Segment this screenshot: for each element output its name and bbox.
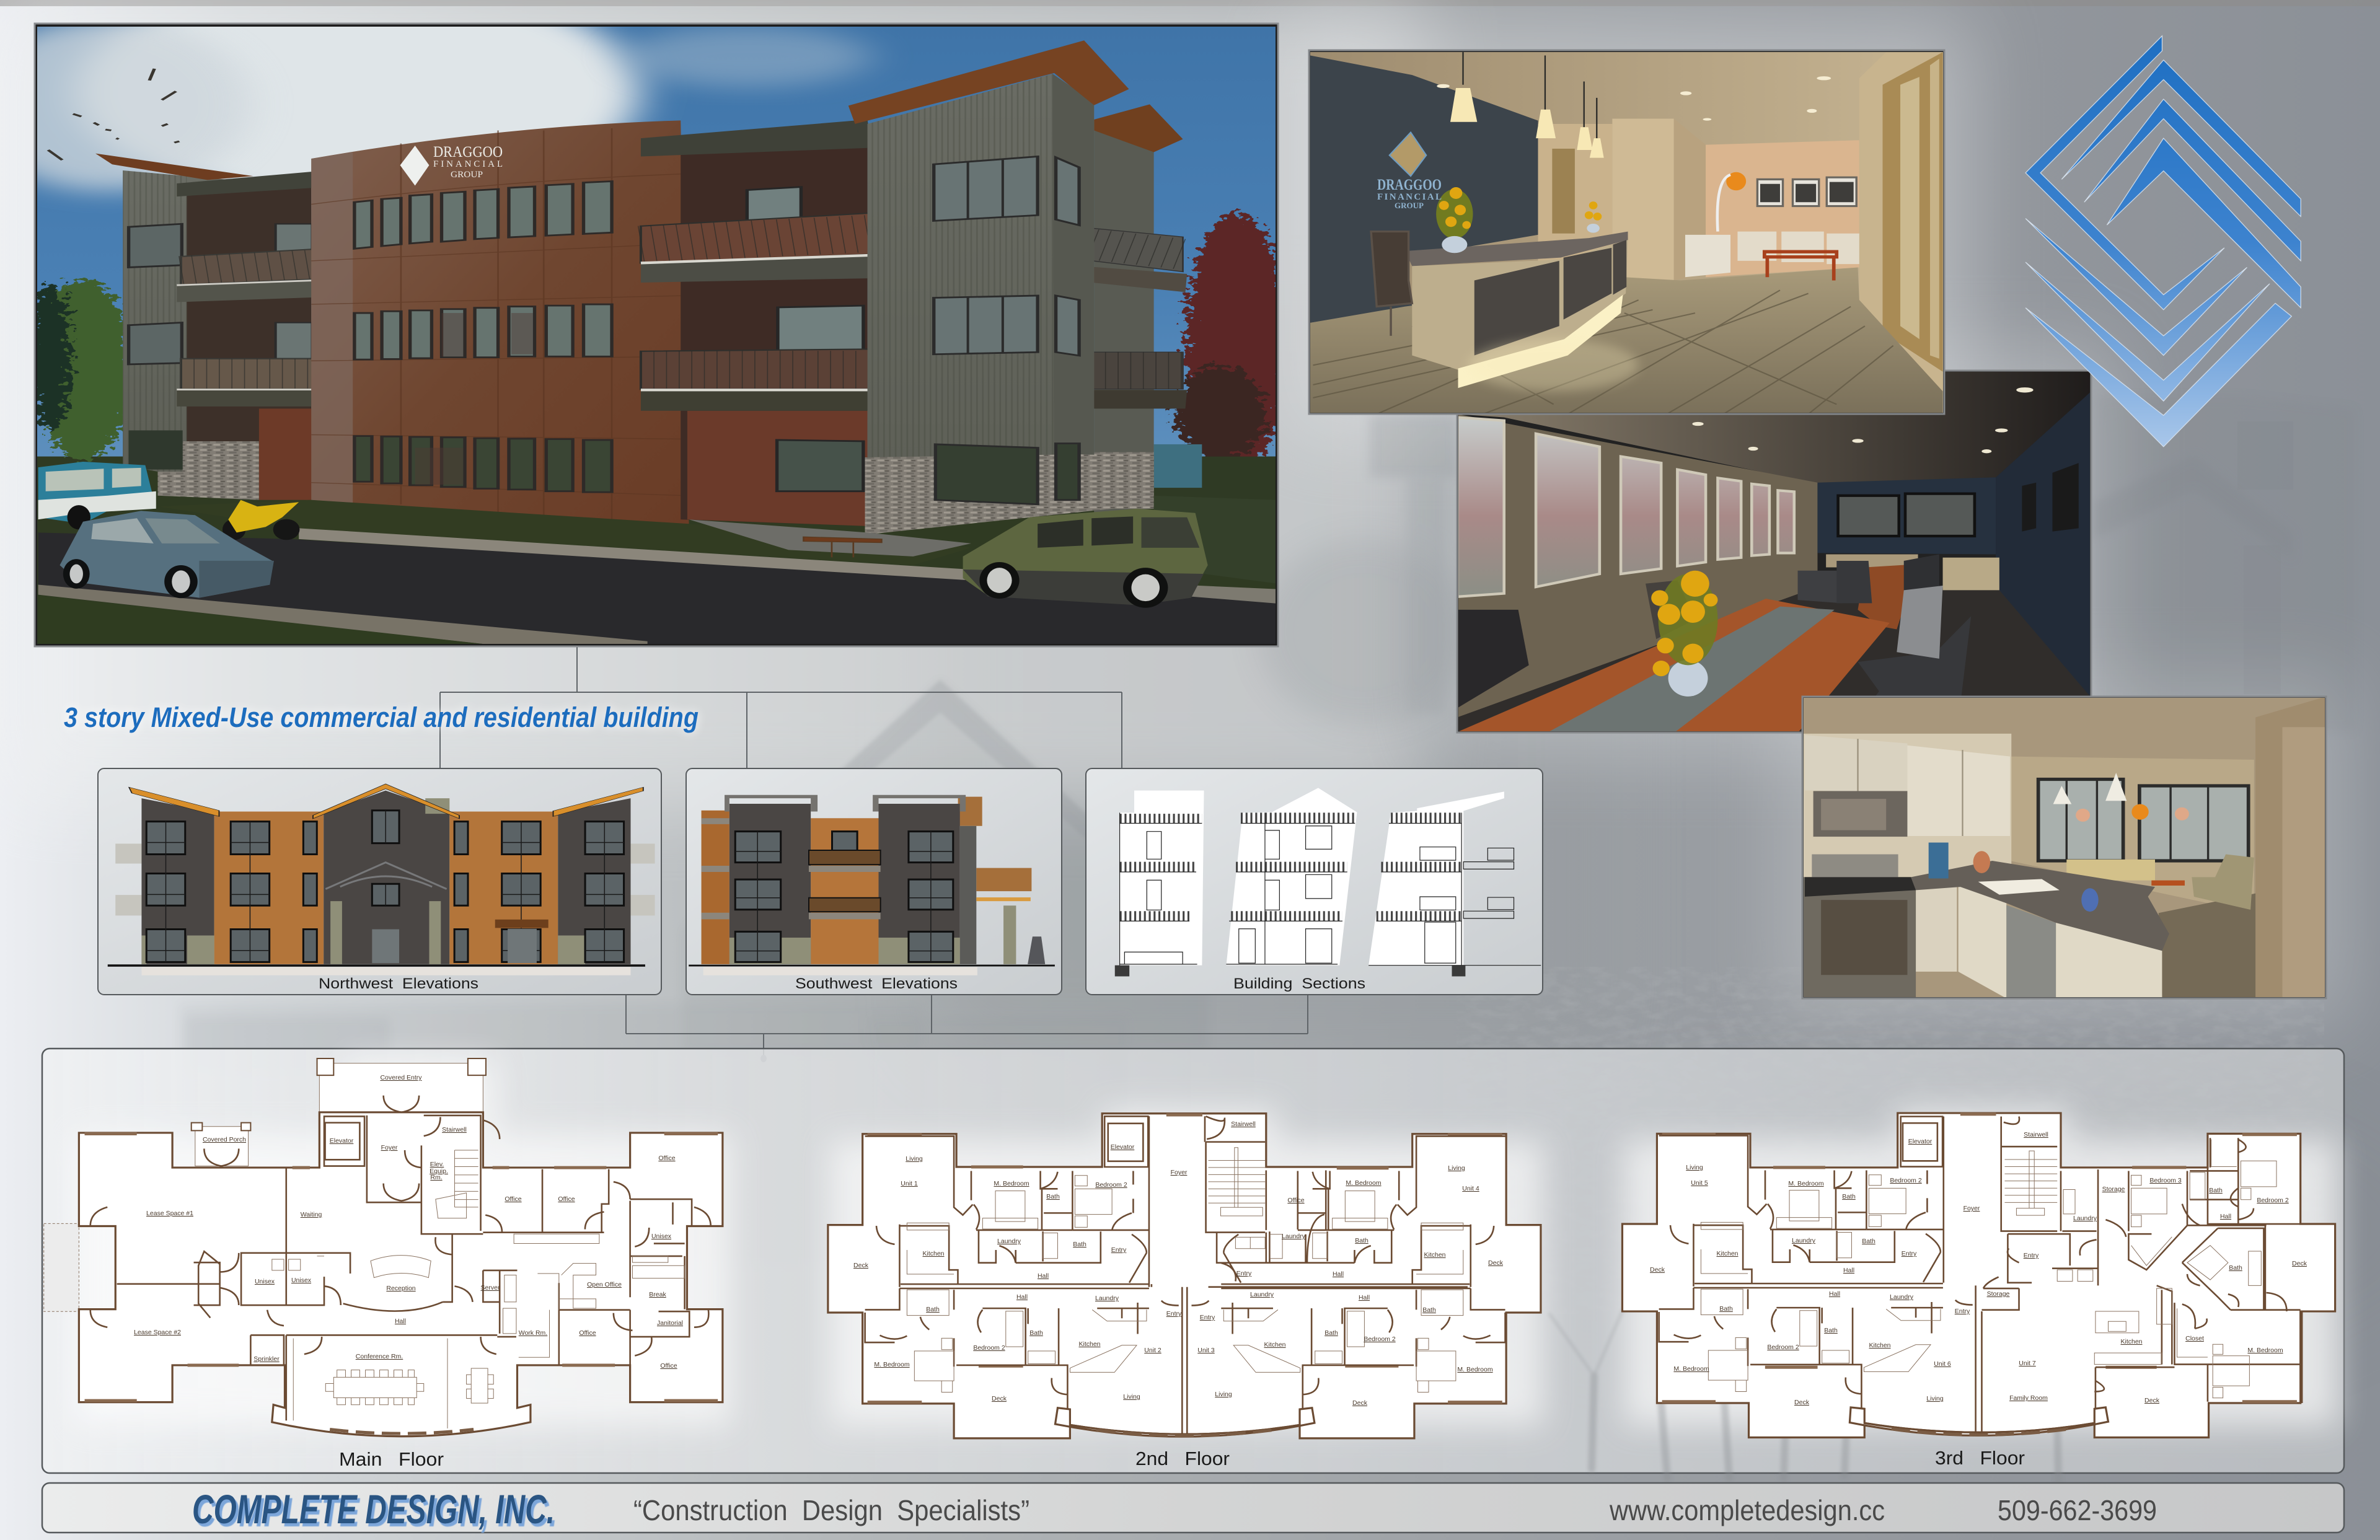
third floor room labels: Living bbox=[1926, 1395, 1944, 1402]
birds bbox=[48, 69, 179, 160]
second floor room labels: Bath bbox=[1073, 1241, 1086, 1248]
panel: building sections bbox=[1086, 768, 1543, 995]
third floor room labels: M. Bedroom bbox=[1788, 1180, 1824, 1187]
third floor room labels: Bedroom 2 bbox=[1767, 1344, 1799, 1351]
lobby wall lettering: FINANCIAL bbox=[1377, 192, 1442, 202]
third floor room labels: Laundry bbox=[2073, 1215, 2097, 1222]
main floor room labels: Equip. bbox=[430, 1168, 448, 1175]
second floor room labels: Laundry bbox=[997, 1238, 1021, 1245]
main floor room labels: Covered Porch bbox=[203, 1136, 246, 1143]
third floor room labels: Bedroom 3 bbox=[2149, 1177, 2182, 1184]
sign lettering: FINANCIAL bbox=[433, 159, 503, 169]
right tower bbox=[868, 74, 1094, 532]
third floor room labels: Bath bbox=[1824, 1327, 1838, 1334]
third floor room labels: Deck bbox=[1794, 1399, 1810, 1406]
road, curbs and grass bbox=[157, 500, 971, 565]
third floor room labels: Entry bbox=[1902, 1250, 1917, 1257]
main floor room labels bbox=[134, 1074, 683, 1370]
website: www.completedesign.cc bbox=[1609, 1494, 1885, 1526]
second floor room labels: Hall bbox=[1016, 1293, 1028, 1301]
footer band bbox=[42, 1483, 2344, 1533]
ghost tree trunks bbox=[1549, 1308, 2059, 1503]
second floor room labels: Deck bbox=[853, 1262, 869, 1269]
second floor room labels: Foyer bbox=[1171, 1169, 1188, 1176]
photo: reception lobby bbox=[1309, 50, 1946, 415]
second floor room labels: Living bbox=[1123, 1393, 1140, 1401]
sign lettering: DRAGGOO bbox=[433, 144, 503, 161]
background watermark: ghost buildings and trees bbox=[180, 397, 2380, 1413]
section drawing bbox=[1115, 788, 1541, 977]
second floor room labels: Unit 2 bbox=[1144, 1347, 1161, 1354]
second floor room labels: Kitchen bbox=[922, 1250, 945, 1257]
connector lines between panels bbox=[437, 646, 1308, 1062]
second floor room labels: Hall bbox=[1038, 1272, 1049, 1280]
main floor room labels: Sprinkler bbox=[253, 1355, 280, 1363]
company name: COMPLETE DESIGN, INC. bbox=[192, 1486, 555, 1532]
main floor room labels: Office bbox=[579, 1329, 596, 1337]
third floor room labels: Deck bbox=[2292, 1260, 2307, 1267]
main floor room labels: Work Rm. bbox=[519, 1329, 547, 1337]
second floor room labels: Entry bbox=[1200, 1314, 1215, 1321]
third floor room labels: Hall bbox=[1829, 1290, 1840, 1298]
second floor room labels: Kitchen bbox=[1078, 1340, 1101, 1348]
main floor room labels: Janitorial bbox=[657, 1319, 683, 1327]
main floor room labels: Elevator bbox=[330, 1137, 354, 1145]
main floor room labels: Open Office bbox=[587, 1281, 622, 1288]
third floor room labels: Living bbox=[1686, 1164, 1703, 1171]
caption: 3rd Floor bbox=[1935, 1447, 2025, 1469]
second floor room labels: Laundry bbox=[1282, 1233, 1306, 1240]
second floor room labels: Unit 1 bbox=[901, 1180, 918, 1187]
second floor room labels: Kitchen bbox=[1424, 1251, 1446, 1259]
panel: southwest elevations bbox=[686, 768, 1062, 995]
second floor room labels: Laundry bbox=[1250, 1291, 1274, 1298]
tagline: “Construction Design Specialists” bbox=[633, 1494, 1029, 1526]
vehicles bbox=[38, 462, 156, 524]
second floor room labels: Living bbox=[906, 1155, 923, 1163]
second floor room labels: M. Bedroom bbox=[1346, 1179, 1382, 1187]
main floor room labels: Unisex bbox=[291, 1277, 312, 1284]
third floor room labels: Deck bbox=[2144, 1397, 2160, 1404]
third floor room labels: Bath bbox=[1862, 1238, 1875, 1245]
third floor room labels: Kitchen bbox=[2120, 1338, 2143, 1345]
third floor room labels: Hall bbox=[1843, 1267, 1854, 1274]
second floor room labels: Bath bbox=[1422, 1306, 1436, 1314]
third floor room labels: Entry bbox=[1955, 1308, 1970, 1315]
main floor room labels: Lease Space #2 bbox=[134, 1329, 181, 1336]
ground and trees bbox=[33, 457, 1287, 648]
third floor room labels: Bedroom 2 bbox=[2257, 1197, 2289, 1204]
lobby wall lettering: GROUP bbox=[1395, 201, 1424, 210]
main floor room labels: Break bbox=[649, 1291, 666, 1298]
main floor room labels: Unisex bbox=[651, 1233, 672, 1240]
third floor room labels: M. Bedroom bbox=[1673, 1365, 1709, 1373]
right balcony recess bbox=[681, 121, 868, 526]
caption: 2nd Floor bbox=[1135, 1448, 1230, 1469]
central curved brown facade bbox=[311, 120, 689, 526]
main floor room labels: Office bbox=[558, 1195, 575, 1203]
second floor room labels: Bath bbox=[1355, 1237, 1368, 1244]
main floor room labels: Conference Rm. bbox=[356, 1353, 403, 1360]
second floor plan bbox=[828, 1114, 1541, 1469]
second floor room labels: Bedroom 2 bbox=[1095, 1181, 1127, 1189]
panel: floor plans bbox=[42, 1049, 2344, 1503]
lobby wall lettering: DRAGGOO bbox=[1377, 177, 1442, 193]
photo: kitchen bbox=[1802, 697, 2326, 1001]
third floor room labels: Hall bbox=[2220, 1213, 2231, 1220]
second floor room labels: Bath bbox=[1324, 1329, 1338, 1337]
second floor room labels: Bedroom 2 bbox=[973, 1344, 1005, 1352]
second floor room labels: Deck bbox=[992, 1395, 1007, 1402]
main floor room labels: Reception bbox=[386, 1285, 416, 1292]
rear tower bbox=[1094, 130, 1154, 513]
second floor room labels: Elevator bbox=[1111, 1143, 1135, 1151]
third floor room labels: Unit 5 bbox=[1691, 1179, 1708, 1187]
third floor room labels: Foyer bbox=[1963, 1205, 1980, 1212]
main floor room labels: Waiting bbox=[301, 1211, 322, 1218]
second floor room labels: Deck bbox=[1352, 1399, 1368, 1407]
third floor room labels: Unit 6 bbox=[1934, 1360, 1951, 1368]
second floor room labels: Bath bbox=[1029, 1329, 1043, 1337]
third floor room labels: Deck bbox=[1650, 1266, 1665, 1274]
third floor room labels: Stairwell bbox=[2024, 1131, 2048, 1138]
heading: 3 story Mixed-Use commercial and residential building bbox=[64, 702, 699, 733]
main floor room labels: Server bbox=[481, 1284, 500, 1291]
third floor room labels: Elevator bbox=[1908, 1138, 1933, 1145]
elevation drawing bbox=[689, 795, 1055, 975]
second floor room labels: Entry bbox=[1236, 1270, 1252, 1277]
third floor room labels: Laundry bbox=[1890, 1293, 1914, 1301]
main floor plan bbox=[44, 1058, 723, 1470]
third floor room labels bbox=[1650, 1131, 2307, 1406]
third floor room labels: Bath bbox=[2229, 1264, 2242, 1272]
company logo: nested blue chevrons bbox=[2025, 36, 2301, 447]
caption: Southwest Elevations bbox=[795, 975, 958, 992]
main floor room labels: Stairwell bbox=[442, 1126, 467, 1133]
background mottled tree canopy bbox=[1457, 967, 2324, 1314]
second floor room labels: Bath bbox=[1046, 1193, 1060, 1200]
second floor room labels: Living bbox=[1448, 1164, 1465, 1172]
third floor room labels: Closet bbox=[2185, 1335, 2204, 1342]
caption: Main Floor bbox=[339, 1448, 444, 1470]
main floor room labels: Lease Space #1 bbox=[146, 1210, 193, 1217]
caption: Northwest Elevations bbox=[319, 975, 478, 992]
second floor room labels: Living bbox=[1215, 1391, 1232, 1398]
panel: northwest elevations bbox=[98, 768, 661, 995]
third floor room labels: M. Bedroom bbox=[2247, 1347, 2283, 1354]
second floor room labels: Office bbox=[1287, 1197, 1305, 1204]
second floor room labels: M. Bedroom bbox=[874, 1361, 910, 1368]
second floor room labels: Stairwell bbox=[1231, 1120, 1256, 1128]
main floor room labels: Unisex bbox=[255, 1278, 275, 1285]
third floor room labels: Bedroom 2 bbox=[1890, 1177, 1922, 1184]
main floor room labels: Covered Entry bbox=[380, 1074, 422, 1081]
photo: conference room bbox=[1457, 371, 2091, 733]
second floor room labels: Unit 4 bbox=[1462, 1185, 1479, 1192]
second floor room labels bbox=[853, 1120, 1504, 1407]
second floor room labels: M. Bedroom bbox=[1457, 1366, 1493, 1373]
third floor room labels: Kitchen bbox=[1869, 1342, 1891, 1349]
third floor room labels: Laundry bbox=[1792, 1237, 1816, 1244]
main floor room labels: Rm. bbox=[430, 1174, 443, 1181]
third floor room labels: Storage bbox=[1987, 1290, 2010, 1298]
second floor room labels: Deck bbox=[1488, 1259, 1504, 1267]
third floor plan bbox=[1622, 1113, 2335, 1469]
sign lettering: GROUP bbox=[451, 170, 483, 180]
phone: 509-662-3699 bbox=[1998, 1494, 2157, 1526]
main floor room labels: Elev. bbox=[430, 1161, 444, 1168]
main floor room labels: Foyer bbox=[381, 1144, 398, 1151]
sign diamond bbox=[400, 146, 429, 186]
plan glows bbox=[74, 1060, 2337, 1425]
second floor room labels: Bedroom 2 bbox=[1364, 1335, 1396, 1343]
second floor room labels: Laundry bbox=[1095, 1295, 1119, 1302]
second floor room labels: Kitchen bbox=[1264, 1341, 1286, 1349]
second floor room labels: Unit 3 bbox=[1197, 1347, 1215, 1354]
second floor room labels: Entry bbox=[1166, 1310, 1182, 1318]
elevation drawing bbox=[108, 784, 655, 975]
hero rendering: exterior of the mixed-use building bbox=[0, 0, 1289, 648]
third floor room labels: Storage bbox=[2102, 1186, 2125, 1193]
second floor room labels: Entry bbox=[1111, 1246, 1127, 1254]
lobby wall lettering bbox=[1377, 177, 1442, 210]
sign lettering bbox=[433, 144, 503, 180]
second floor room labels: Bath bbox=[926, 1306, 940, 1313]
third floor room labels: Bath bbox=[1842, 1193, 1856, 1200]
third floor room labels: Entry bbox=[2024, 1252, 2039, 1259]
caption: Building Sections bbox=[1233, 975, 1365, 992]
main floor room labels: Office bbox=[505, 1195, 522, 1203]
left wing bbox=[123, 170, 311, 500]
third floor room labels: Unit 7 bbox=[2019, 1360, 2036, 1367]
third floor room labels: Family Room bbox=[2009, 1394, 2048, 1402]
third floor room labels: Kitchen bbox=[1716, 1250, 1739, 1257]
bench bbox=[803, 537, 881, 557]
second floor room labels: M. Bedroom bbox=[994, 1180, 1029, 1187]
main floor room labels: Office bbox=[658, 1155, 676, 1162]
second floor room labels: Hall bbox=[1359, 1294, 1370, 1301]
main floor room labels: Office bbox=[660, 1362, 677, 1370]
third floor room labels: Bath bbox=[1719, 1305, 1733, 1313]
second floor room labels: Hall bbox=[1333, 1270, 1344, 1278]
main floor room labels: Hall bbox=[395, 1318, 406, 1325]
third floor room labels: Bath bbox=[2209, 1187, 2223, 1194]
